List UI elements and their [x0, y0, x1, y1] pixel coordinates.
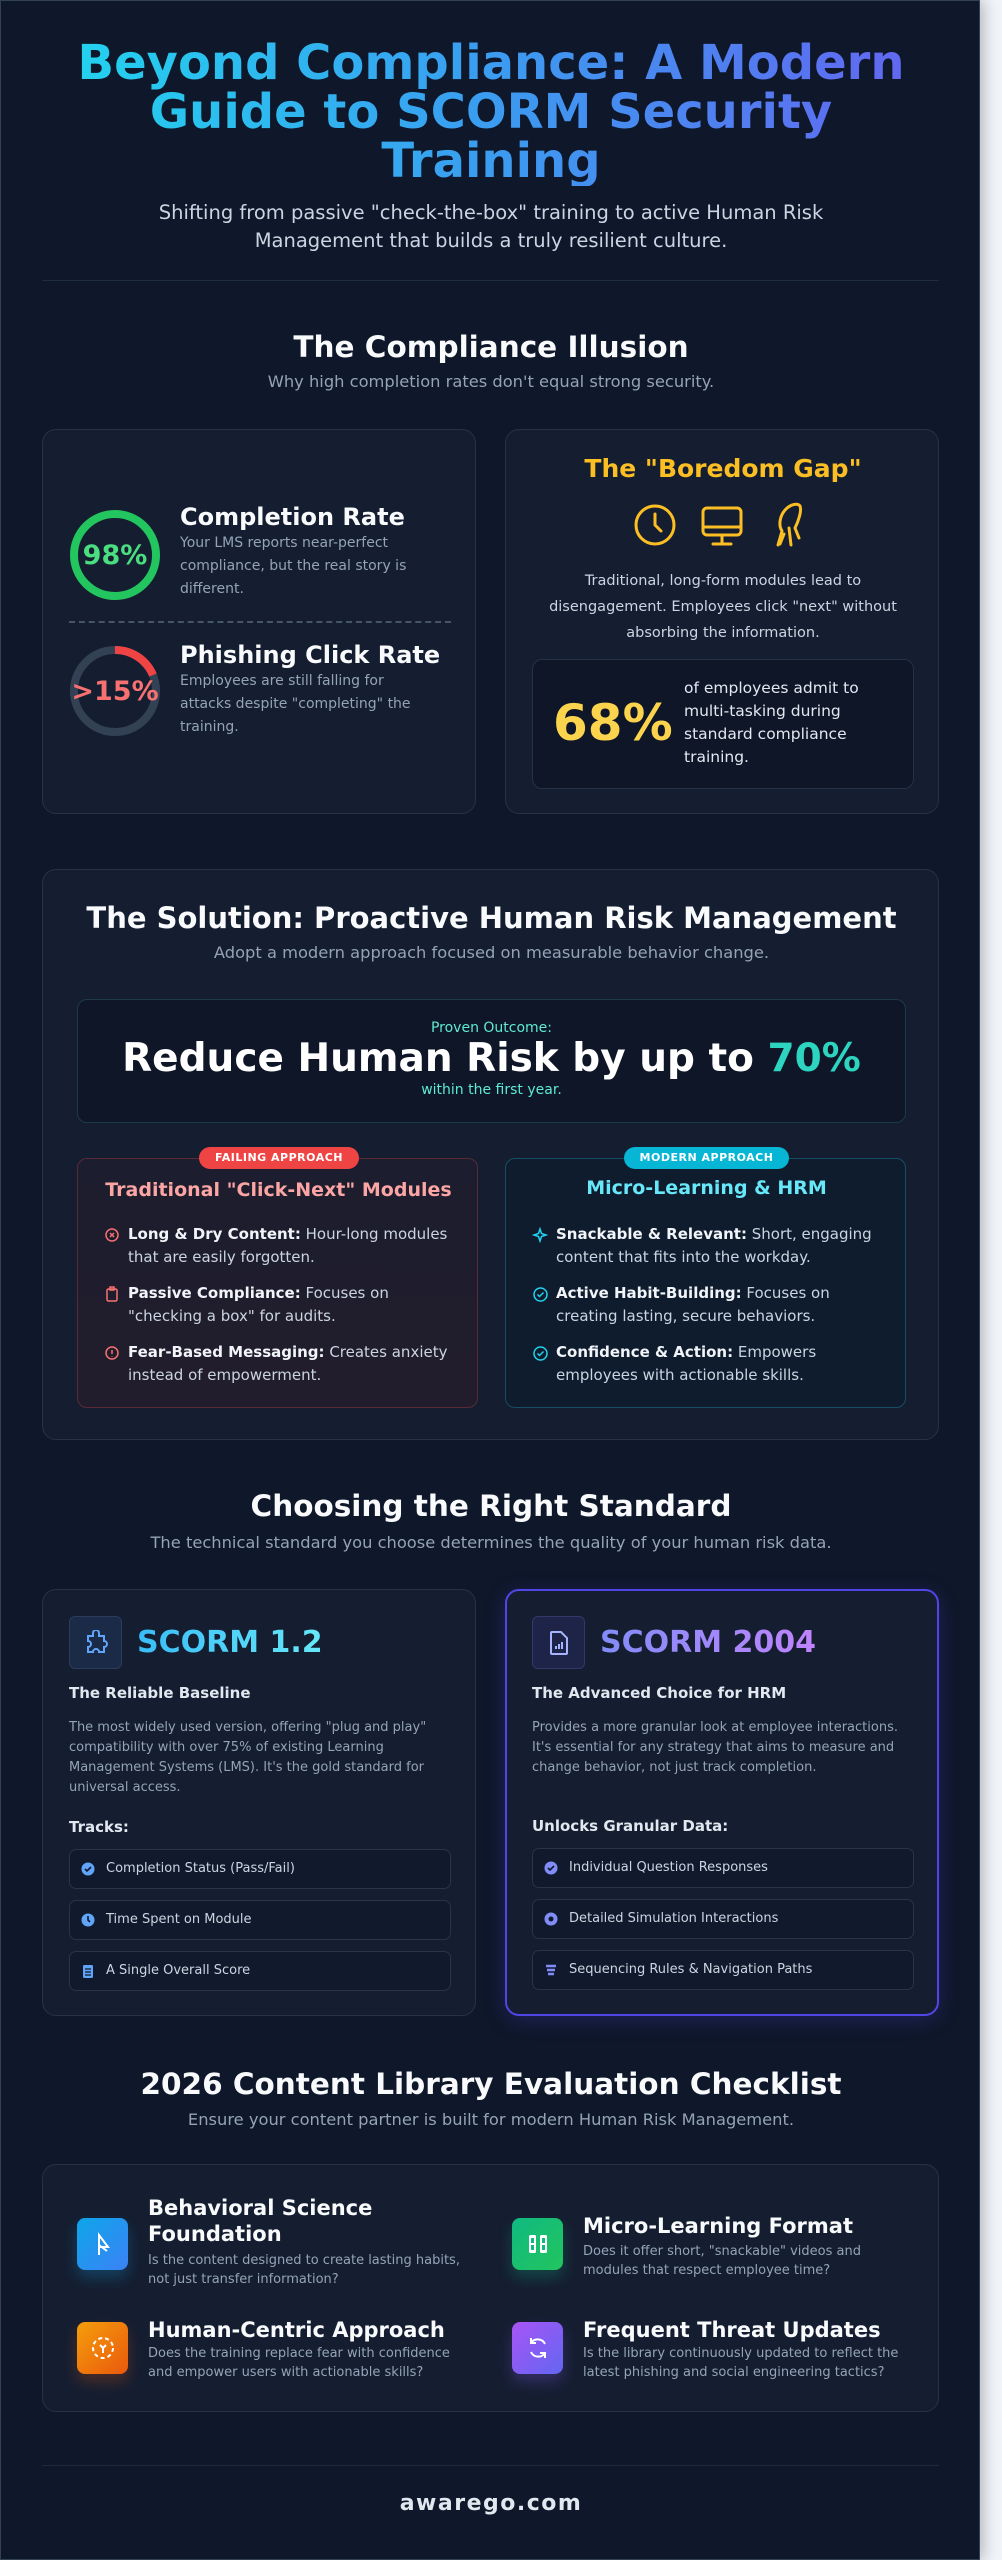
text: phishing click rate: Employees are still falling for attacks despite "completing" the training.: [180, 673, 411, 735]
checklist item: human-centric: Human-Centric Approach: [148, 2318, 445, 2342]
text: phishing click rate: [180, 641, 440, 735]
badge: modern: [624, 1147, 789, 1169]
panel: modern approach: [505, 1158, 906, 1408]
chart: completion ring: 98%: [83, 540, 147, 571]
heading: compliance illusion: The Compliance Illusion: [293, 330, 689, 364]
checklist item: human-centric: Does the training replace fear with confidence and empower users with actionable skills?: [148, 2346, 450, 2380]
panel: SCORM 1.2: [42, 1589, 476, 2016]
panel: SCORM 2004: Unlocks Granular Data:: [532, 1817, 728, 1835]
heading: SCORM 1.2: SCORM 1.2: [137, 1625, 323, 1660]
list item: Individual Question Responses: [569, 1860, 768, 1875]
heading: SCORM 2004: SCORM 2004: [600, 1625, 816, 1660]
panel: completion and phishing stats: [42, 429, 476, 814]
list item: [69, 1849, 451, 1889]
checklist item: human-centric: [70, 2318, 450, 2388]
text: boredom description: Traditional, long-form modules lead to disengagement. Employees click "next" without absorbing the information.: [549, 573, 897, 641]
list item: [532, 1950, 914, 1990]
icon: puzzle: [69, 1616, 122, 1669]
panel: SCORM 1.2: Tracks:: [69, 1818, 129, 1836]
heading: solution: The Solution: Proactive Human Risk Management: [86, 901, 897, 935]
checklist item: threat updates: Is the library continuously updated to reflect the latest phishing and social engineering tactics?: [583, 2346, 898, 2380]
callout: proven outcome: Proven Outcome:: [431, 1020, 552, 1036]
icons: clock monitor hand: [634, 502, 802, 546]
panel: solution: [42, 869, 939, 1440]
list item: Time Spent on Module: [106, 1912, 252, 1927]
callout: proven outcome: [77, 999, 906, 1123]
checklist item: behavioral science: Behavioral Science: [148, 2196, 372, 2220]
subheading: Why high completion rates don't equal strong security.: [268, 372, 714, 391]
list item: [532, 1899, 914, 1939]
checklist item: micro-learning: Micro-Learning Format: [583, 2214, 853, 2238]
panel: SCORM 2004: The Advanced Choice for HRM: [532, 1684, 786, 1702]
panel: failing approach: [77, 1158, 478, 1408]
list item: [69, 1951, 451, 1991]
subheading: Adopt a modern approach focused on measurable behavior change.: [214, 943, 769, 962]
list item: [69, 1900, 451, 1940]
footer: website: awarego.com: [400, 2491, 582, 2516]
panel: SCORM 1.2: The Reliable Baseline: [69, 1684, 251, 1702]
callout: proven outcome: within the first year.: [421, 1082, 562, 1098]
subheading: Ensure your content partner is built for modern Human Risk Management.: [188, 2110, 794, 2129]
checklist item: behavioral science: Is the content designed to create lasting habits, not just transfer information?: [148, 2253, 460, 2287]
subheading: The technical standard you choose determines the quality of your human risk data.: [150, 1533, 832, 1552]
chart: completion ring: [70, 510, 160, 600]
icon: document chart: [532, 1616, 585, 1669]
text: completion rate: Your LMS reports near-perfect compliance, but the real story is different.: [180, 535, 406, 597]
callout: 68% stat: 68%: [553, 694, 673, 752]
badge: failing: FAILING APPROACH: [215, 1151, 343, 1164]
list item: fear: Fear-Based Messaging: Creates anxiety instead of empowerment.: [128, 1343, 447, 1384]
heading: micro-learning: Micro-Learning & HRM: [586, 1177, 827, 1199]
panel: SCORM 2004: [505, 1589, 939, 2016]
heading: checklist: 2026 Content Library Evaluation Checklist: [140, 2067, 842, 2101]
heading: traditional: Traditional "Click-Next" Modules: [105, 1179, 452, 1201]
checklist item: behavioral science: [72, 2196, 460, 2287]
heading: choosing standard: Choosing the Right Standard: [251, 1489, 731, 1523]
list item: habit: Active Habit-Building: Focuses on creating lasting, secure behaviors.: [556, 1284, 830, 1325]
chart: phishing ring: [70, 646, 160, 736]
list item: long & dry: Long & Dry Content: Hour-long modules that are easily forgotten.: [128, 1225, 447, 1266]
chart: phishing ring: >15%: [71, 676, 159, 707]
subtitle: Shifting from passive "check-the-box" training to active Human Risk Management that builds a truly resilient culture.: [159, 201, 823, 252]
list item: Sequencing Rules & Navigation Paths: [569, 1962, 812, 1977]
badge: modern: MODERN APPROACH: [640, 1151, 773, 1164]
title: Beyond Compliance: A Modern Guide to SCORM Security Training: [78, 35, 904, 189]
checklist item: micro-learning: Does it offer short, "snackable" videos and modules that respect employee time?: [583, 2244, 861, 2278]
list item: passive: Passive Compliance: Focuses on "checking a box" for audits.: [128, 1284, 389, 1325]
list item: Completion Status (Pass/Fail): [106, 1861, 295, 1876]
text: completion rate: Completion Rate: [180, 503, 405, 531]
callout: 68% stat: of employees admit to multi-tasking during standard compliance training.: [684, 679, 859, 766]
panel: boredom gap: [505, 429, 939, 814]
text: description: Provides a more granular look at employee interactions. It's essential for any strategy that aims to measure and change behavior, not just track completion.: [532, 1720, 898, 1775]
checklist item: threat updates: [506, 2318, 898, 2388]
text: completion rate: [180, 503, 406, 597]
checklist item: micro-learning: [507, 2214, 861, 2283]
list item: [532, 1848, 914, 1888]
list item: Detailed Simulation Interactions: [569, 1911, 778, 1926]
callout: 68% stat: [532, 659, 914, 789]
list item: snackable: Snackable & Relevant: Short, engaging content that fits into the workday.: [556, 1225, 872, 1266]
text: phishing click rate: Phishing Click Rate: [180, 641, 440, 669]
badge: failing: [199, 1147, 359, 1169]
text: description: The most widely used version, offering "plug and play" compatibility with over 75% of existing Learning Management Systems (LMS). It's the gold standard for universal access.: [69, 1720, 426, 1795]
checklist item: threat updates: Frequent Threat Updates: [583, 2318, 881, 2342]
list item: A Single Overall Score: [106, 1963, 250, 1978]
panel: checklist: [42, 2164, 939, 2412]
heading: boredom gap: The "Boredom Gap": [584, 454, 862, 483]
list item: confidence: Confidence & Action: Empowers employees with actionable skills.: [556, 1343, 816, 1384]
callout: proven outcome: Reduce Human Risk by up to 70%: [122, 1036, 861, 1081]
checklist item: behavioral science: Foundation: [148, 2222, 282, 2246]
